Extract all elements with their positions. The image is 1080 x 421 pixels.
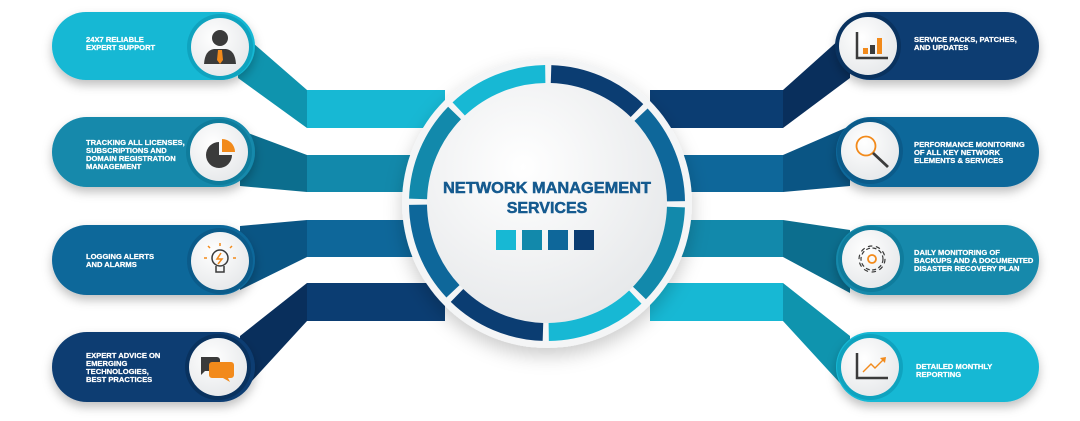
panel: right 3 [836, 225, 1039, 295]
panel: left 2 [52, 117, 255, 187]
panel: right 2: ELEMENTS & SERVICES [914, 156, 1003, 165]
panel: right 1 [835, 12, 1039, 80]
panel: left 2: SUBSCRIPTIONS AND [86, 146, 167, 155]
panel: right 4 [836, 332, 1039, 402]
connector: left band 4 [240, 283, 445, 394]
squares [496, 230, 594, 250]
connector: left band 3 [240, 220, 445, 290]
connector: right band 1 [650, 30, 850, 128]
icon: line chart [857, 353, 888, 378]
icon: gear [859, 246, 885, 272]
panel: left 3 [52, 225, 255, 295]
panel: right 2: OF ALL KEY NETWORK [914, 148, 1000, 157]
icon: bar chart [857, 32, 888, 58]
title [443, 180, 651, 217]
panel: left 4: EXPERT ADVICE ON [86, 351, 160, 360]
icon: magnifier [856, 136, 888, 167]
icon: person [204, 30, 236, 64]
connector: left band 2 [240, 130, 445, 192]
panel: right 3: DAILY MONITORING OF [914, 248, 1000, 257]
panel: left 3: AND ALARMS [86, 260, 137, 269]
title: NETWORK MANAGEMENT [443, 180, 651, 197]
connector: right band 2 [650, 126, 850, 192]
panel: left 4: EMERGING [86, 359, 127, 368]
panel: left 2: DOMAIN REGISTRATION [86, 154, 176, 163]
panel: left 1: 24X7 RELIABLE [86, 35, 144, 44]
panel: left 1 [52, 12, 255, 80]
central circle [365, 21, 729, 385]
panel: right 3: BACKUPS AND A DOCUMENTED [914, 256, 1034, 265]
icon: light bulb [204, 243, 236, 272]
panel: left 3: LOGGING ALERTS [86, 252, 154, 261]
panel: left 2: MANAGEMENT [86, 162, 142, 171]
icon: chat bubbles [201, 357, 234, 382]
connector: right band 3 [650, 220, 850, 293]
panel: right 1: AND UPDATES [914, 43, 968, 52]
panel: right 2: PERFORMANCE MONITORING [914, 140, 1025, 149]
panel: right 4: DETAILED MONTHLY [916, 362, 992, 371]
panel: left 4: BEST PRACTICES [86, 375, 152, 384]
panel: right 1: SERVICE PACKS, PATCHES, [914, 35, 1017, 44]
panel: right 4: REPORTING [916, 370, 961, 379]
panel: left 4 [52, 332, 255, 402]
panel: left 4: TECHNOLOGIES, [86, 367, 149, 376]
title: SERVICES [507, 200, 588, 217]
panel: left 1: EXPERT SUPPORT [86, 43, 156, 52]
panel: right 3: DISASTER RECOVERY PLAN [914, 264, 1020, 273]
icon: pie chart [206, 139, 235, 168]
panel: left 2: TRACKING ALL LICENSES, [86, 138, 185, 147]
panel: right 2 [836, 117, 1039, 187]
connector: left band 1 [238, 30, 445, 128]
connector: right band 4 [650, 283, 850, 394]
